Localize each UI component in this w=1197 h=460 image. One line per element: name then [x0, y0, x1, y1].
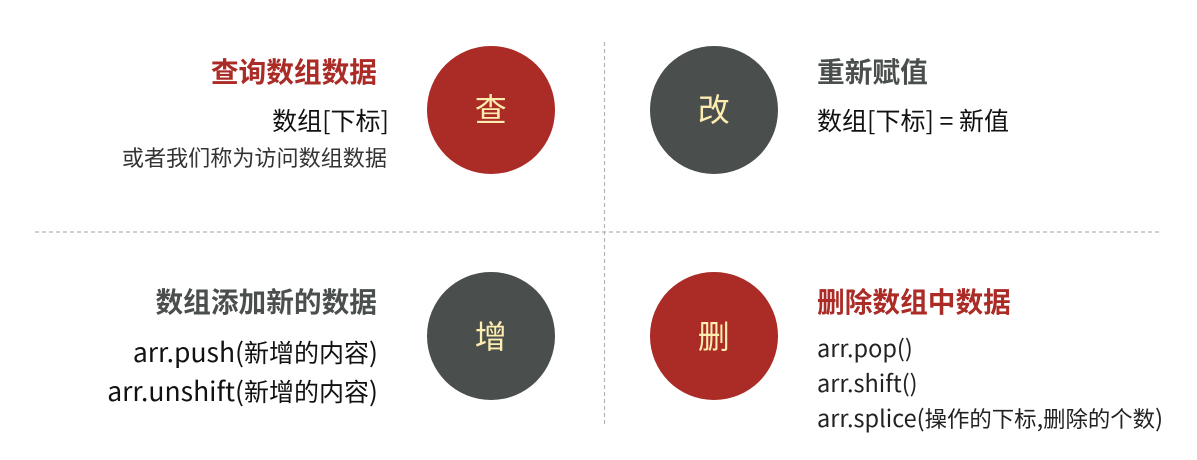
icon: add circle	[427, 272, 554, 400]
text: update syntax: 数组[下标] = 新值	[817, 102, 1009, 138]
text: push: arr.push(新增的内容)	[133, 331, 378, 370]
panel: update	[650, 46, 1009, 174]
text: shift: arr.shift()	[817, 365, 918, 399]
icon: delete circle: 删	[698, 312, 730, 358]
text: query note: 或者我们称为访问数组数据	[122, 141, 387, 173]
text: splice: arr.splice(操作的下标,删除的个数)	[817, 400, 1163, 434]
icon: query circle: 查	[475, 85, 507, 131]
panel: add	[107, 272, 555, 409]
text: query syntax: 数组[下标]	[272, 102, 389, 138]
heading: update: 重新赋值	[817, 50, 928, 90]
icon: delete circle	[650, 272, 778, 400]
text: unshift: arr.unshift(新增的内容)	[107, 370, 378, 409]
icon: update circle	[650, 46, 778, 174]
heading: query: 查询数组数据	[211, 50, 377, 90]
icon: update circle: 改	[698, 85, 730, 131]
heading: delete: 删除数组中数据	[817, 280, 1011, 320]
heading: add: 数组添加新的数据	[155, 280, 377, 320]
icon: query circle	[427, 46, 554, 174]
panel: delete	[650, 272, 1163, 434]
text: pop: arr.pop()	[817, 330, 913, 364]
panel: query	[122, 46, 555, 174]
icon: add circle: 增	[475, 312, 507, 358]
